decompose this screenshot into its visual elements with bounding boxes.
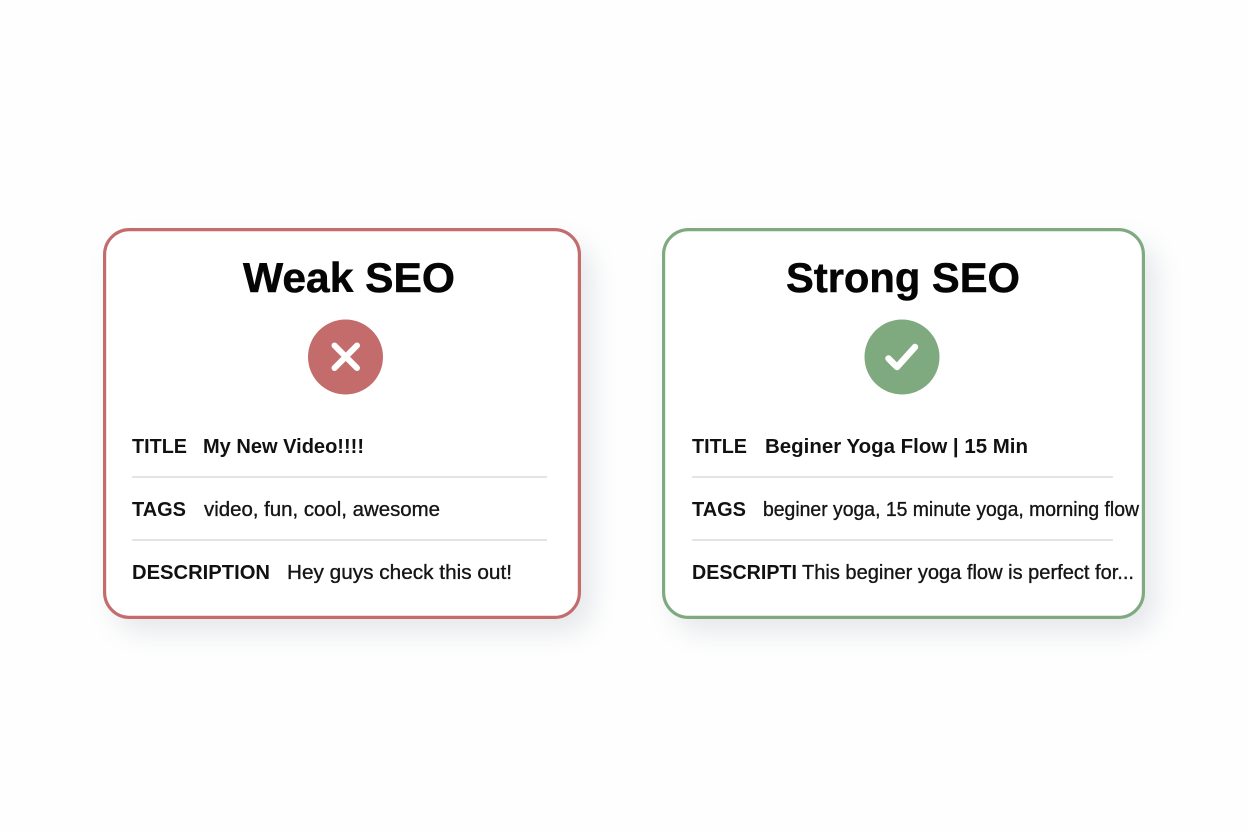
- row: title: [132, 435, 364, 458]
- row: tags: TAGS: [132, 498, 186, 521]
- panel: strong SEO: [664, 230, 1155, 631]
- row: tags: video, fun, cool, awesome: [204, 498, 440, 521]
- row: title: My New Video!!!!: [203, 435, 364, 458]
- icon: green check: [864, 320, 940, 394]
- row: description: [132, 561, 512, 584]
- row: description: DESCRIPTI: [692, 561, 797, 584]
- panel: weak SEO: [105, 230, 591, 631]
- row: tags: beginer yoga, 15 minute yoga, morning flow: [763, 498, 1139, 521]
- row: description: Hey guys check this out!: [287, 561, 512, 584]
- icon: red cross: [308, 320, 383, 394]
- row: title: TITLE: [132, 435, 187, 458]
- row: tags: TAGS: [692, 498, 746, 521]
- row: title: Beginer Yoga Flow | 15 Min: [765, 435, 1028, 458]
- row: title: TITLE: [692, 435, 747, 458]
- heading: Strong SEO: Strong SEO: [786, 254, 1020, 301]
- row: description: DESCRIPTION: [132, 561, 270, 584]
- heading: Weak SEO: Weak SEO: [243, 254, 455, 301]
- row: description: This beginer yoga flow is perfect for...: [802, 561, 1134, 584]
